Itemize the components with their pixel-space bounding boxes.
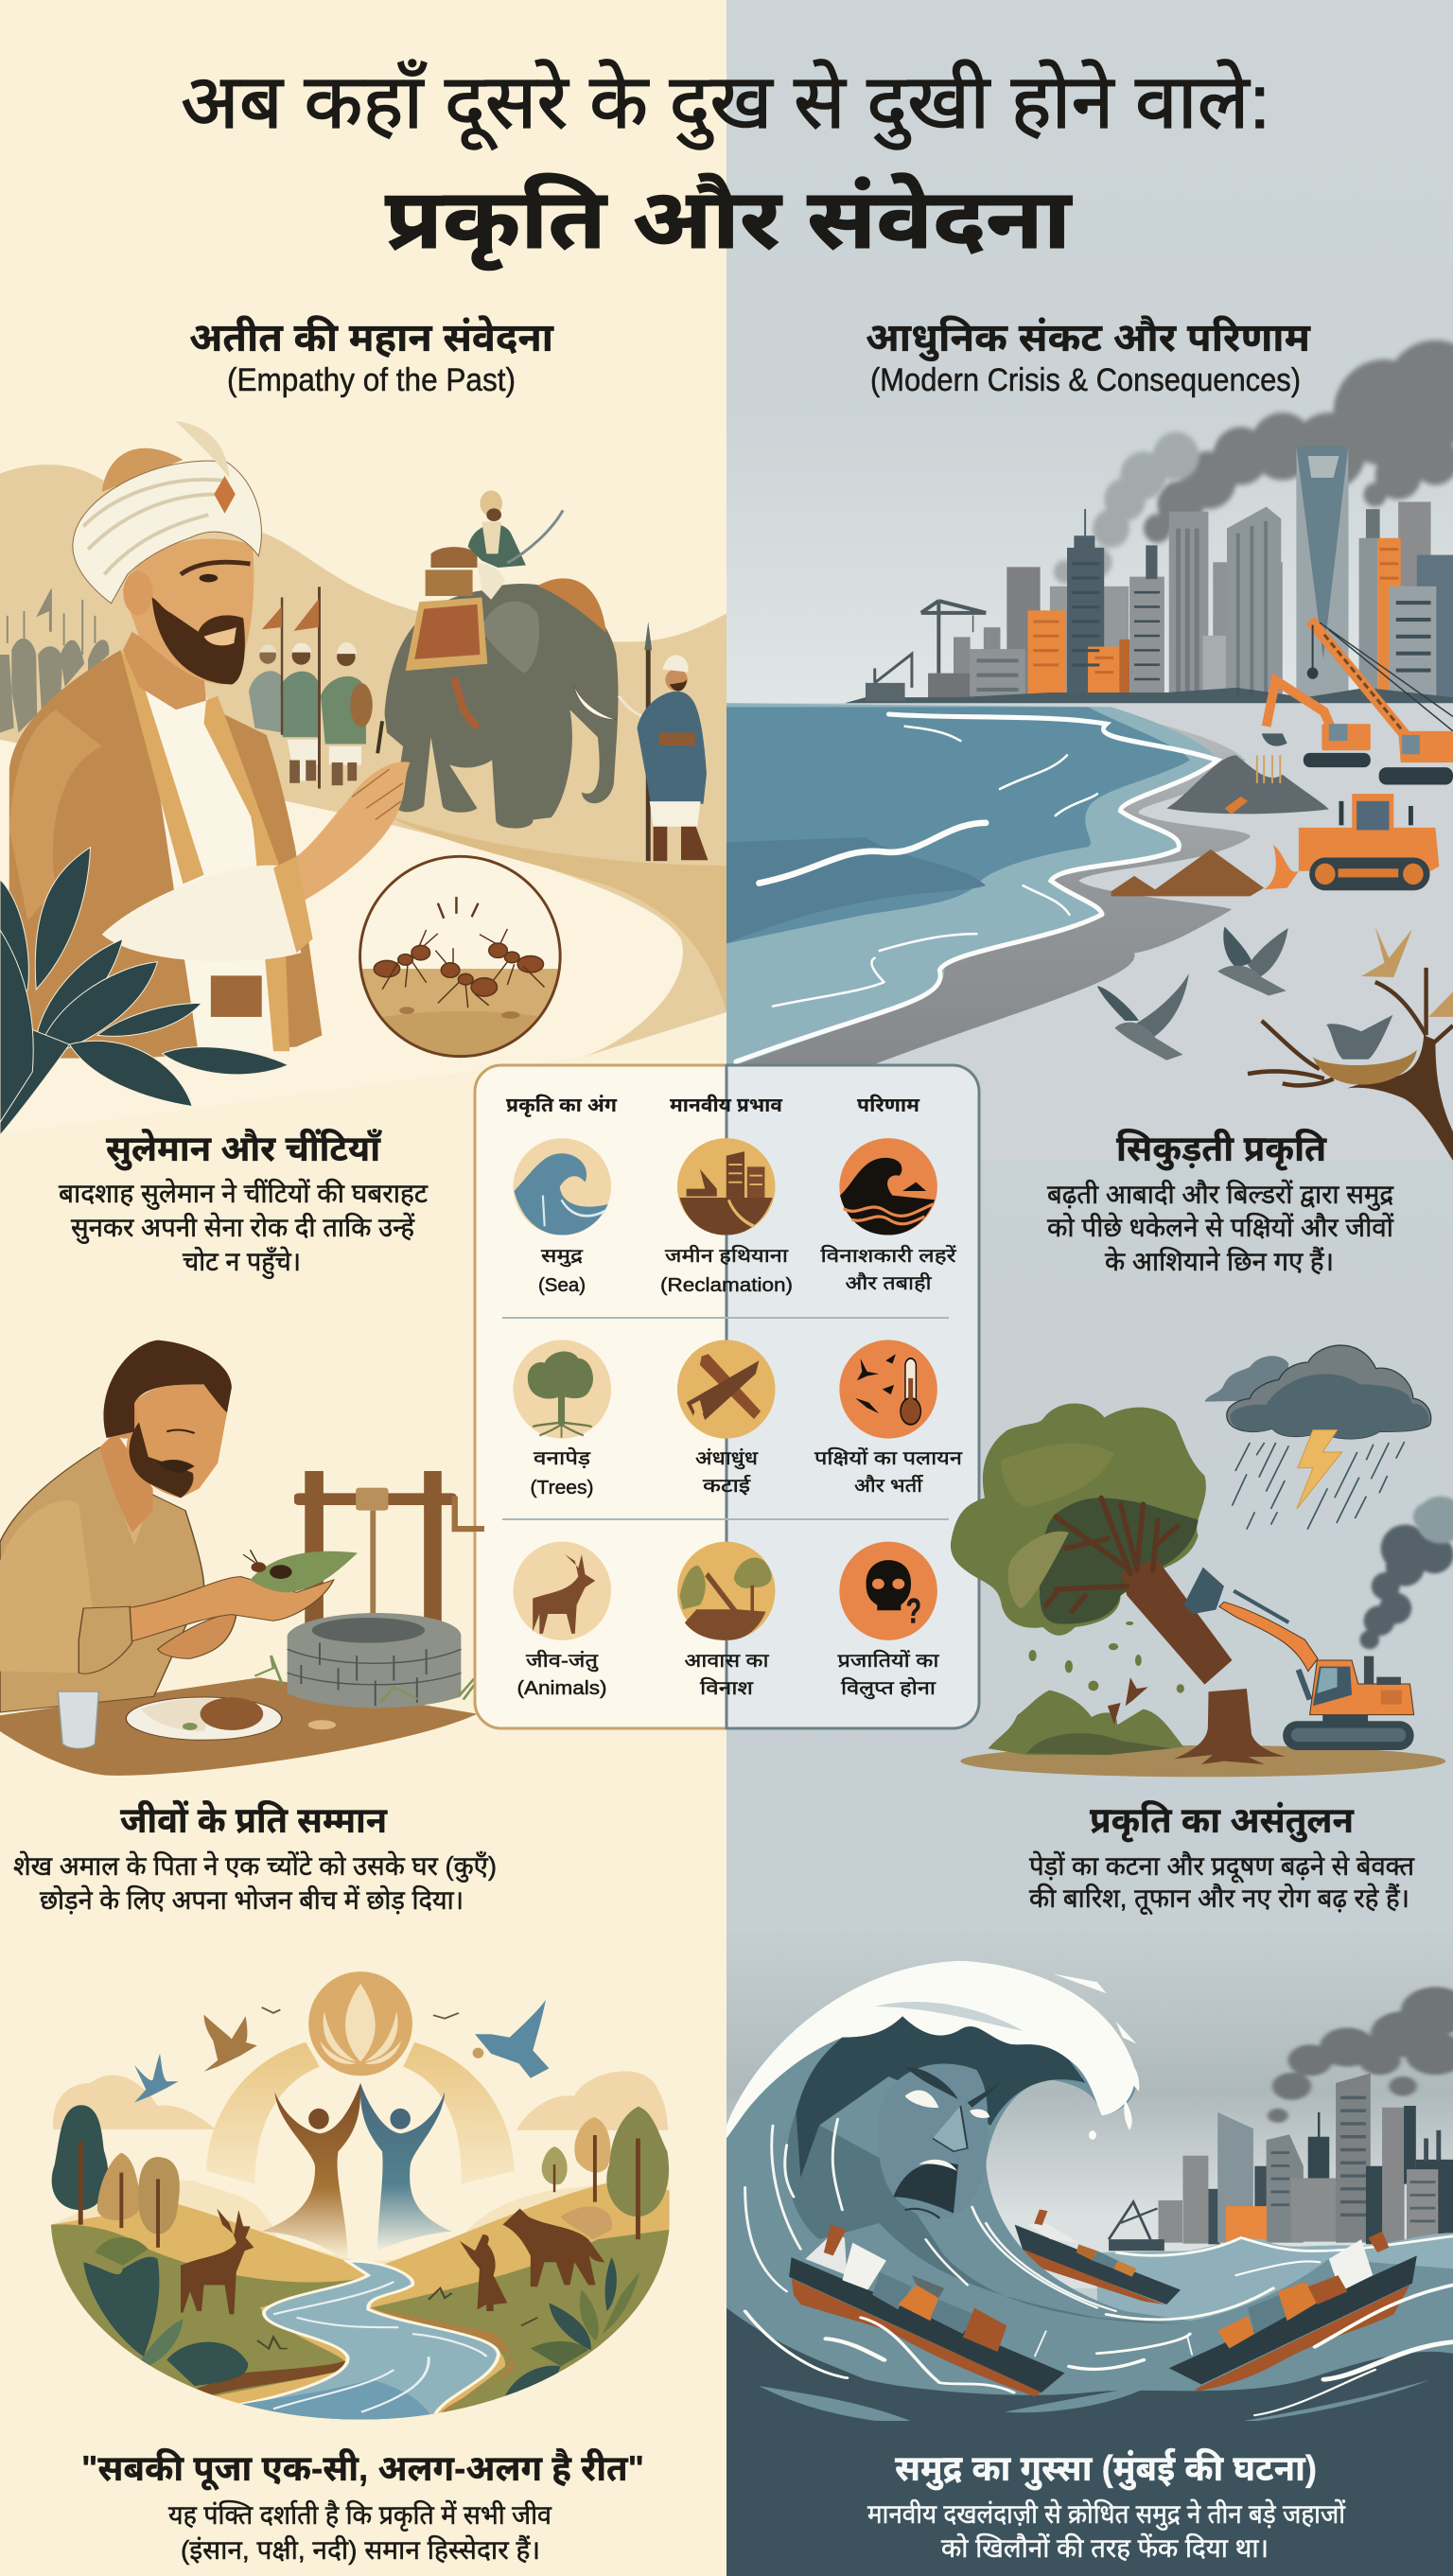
rain <box>1232 1442 1405 1530</box>
text block: nature imbalance <box>1029 1799 1415 1915</box>
storm sky <box>726 1930 1453 2288</box>
dark wave interior <box>796 2016 1086 2178</box>
panel: comparison table <box>475 1065 979 1728</box>
distant swell <box>1097 2233 1453 2441</box>
joined human figures <box>262 2083 452 2257</box>
distant cranes <box>875 601 986 688</box>
table labels: जीव-जंतु <box>526 1649 599 1673</box>
sand land <box>726 703 1453 1161</box>
text block: respect for creatures: शेख अमाल के पिता ने एक च्योंटे को उसके घर (कुएँ) <box>13 1850 497 1883</box>
bulldozer <box>1264 794 1439 890</box>
text block: anger of the sea: को खिलौनों की तरह फेंक दिया था। <box>941 2532 1269 2563</box>
excavator <box>1262 680 1371 767</box>
heading: empathy of the past: अतीत की महान संवेदना <box>189 315 554 359</box>
text block: anger of the sea: समुद्र का गुस्सा (मुंबई की घटना) <box>895 2447 1317 2491</box>
text block: quote: "सबकी पूजा एक-सी, अलग-अलग है रीत" <box>81 2447 644 2491</box>
white crest <box>726 1961 1135 2138</box>
text block: nature imbalance: की बारिश, तूफान और नए रोग बढ़ रहे हैं। <box>1029 1883 1409 1915</box>
table labels: अंधाधुंध <box>695 1447 759 1470</box>
heading: empathy of the past: (Empathy of the Past) <box>227 362 516 398</box>
left cargo ship <box>789 2225 1065 2396</box>
shirt <box>0 1447 204 1712</box>
guard with spear <box>637 622 708 861</box>
plate of food <box>126 1697 282 1740</box>
icon: sea wave <box>513 1138 611 1235</box>
cream road <box>0 740 683 1135</box>
title <box>181 59 1270 272</box>
skyline <box>845 447 1453 703</box>
lightning bolt <box>1297 1430 1342 1509</box>
foam swirls over ships <box>745 2261 1453 2415</box>
text block: anger of the sea <box>867 2447 1346 2563</box>
text block: shrinking nature: सिकुड़ती प्रकृति <box>1116 1128 1327 1171</box>
heading: empathy of the past <box>189 315 554 398</box>
table labels: विनाशकारी लहरें <box>821 1244 956 1267</box>
clouds <box>53 2071 668 2130</box>
table labels: प्रजातियों का <box>838 1649 939 1672</box>
elephant shadow ground <box>380 813 726 1012</box>
forearm and cupped hands <box>158 1613 236 1658</box>
table labels: (Sea) <box>538 1275 586 1296</box>
heading: modern crisis: (Modern Crisis & Consequences) <box>870 362 1301 398</box>
table labels: वनापेड़ <box>534 1446 590 1469</box>
trunk and branches <box>1046 1498 1232 1685</box>
icon: tree <box>513 1340 611 1439</box>
neck and face <box>123 632 206 710</box>
building windows <box>1271 2096 1435 2222</box>
illustration: unity of all beings <box>51 1971 670 2438</box>
text block: respect for creatures <box>13 1799 497 1915</box>
river <box>234 2261 499 2424</box>
wolf <box>502 2208 604 2287</box>
excavator <box>1183 1568 1414 1750</box>
lattice crane <box>1307 621 1453 784</box>
table labels: कटाई <box>703 1475 751 1497</box>
table <box>0 1677 477 1776</box>
rubble pile <box>1166 755 1329 814</box>
fallen bush <box>988 1691 1183 1755</box>
table icons <box>513 1138 937 1640</box>
table labels: और भर्ती <box>854 1474 923 1497</box>
text block: shrinking nature: को पीछे धकेलने से पक्षियों और जीवों <box>1047 1212 1394 1242</box>
table labels: पक्षियों का पलायन <box>814 1446 963 1469</box>
right cargo ship <box>1169 2232 1417 2391</box>
text block: respect for creatures: जीवों के प्रति सम्मान <box>120 1799 388 1841</box>
table labels: समुद्र <box>541 1246 583 1268</box>
illustration: angry sea wave and ships <box>726 1930 1453 2441</box>
table labels <box>516 1244 963 1700</box>
woman <box>460 2234 507 2311</box>
face <box>125 1383 227 1498</box>
soldiers <box>249 587 373 789</box>
illustration: man and ant at the well <box>0 1341 484 1776</box>
heading: modern crisis <box>866 315 1311 398</box>
trees right <box>542 2107 669 2239</box>
table labels: (Trees) <box>530 1478 594 1498</box>
elephant <box>377 547 644 829</box>
icon: destructive wave <box>839 1138 937 1235</box>
birds <box>1097 926 1288 1060</box>
well <box>254 1471 484 1708</box>
dark lower sea <box>726 2308 1453 2441</box>
falling leaves <box>1029 1621 1184 1693</box>
table card left half <box>475 1065 726 1728</box>
birds <box>134 2000 549 2103</box>
table labels: (Animals) <box>516 1678 607 1699</box>
foreground foliage <box>83 2257 159 2357</box>
text block: Sulaiman and ants: सुलेमान और चींटियाँ <box>106 1128 382 1171</box>
table labels: (Reclamation) <box>660 1275 793 1296</box>
icon: birds and thermometer <box>839 1340 937 1439</box>
giant wave <box>726 1961 1453 2441</box>
leaf and ant <box>250 1551 358 1592</box>
city skyline <box>1109 2074 1453 2251</box>
icon: skull and question mark <box>839 1542 937 1640</box>
dirt mound <box>1112 850 1264 896</box>
sea <box>726 703 1217 1069</box>
rider <box>468 491 563 600</box>
text block: Sulaiman and ants <box>59 1128 429 1279</box>
dark leaves <box>0 848 289 1135</box>
title: प्रकृति और संवेदना <box>385 172 1073 272</box>
table labels: जमीन हथियाना <box>665 1244 789 1267</box>
text block: shrinking nature: बढ़ती आबादी और बिल्डरों द्वारा समुद्र <box>1047 1179 1394 1211</box>
building window stripes <box>976 521 1430 695</box>
title: अब कहाँ दूसरे के दुख से दुखी होने वाले: <box>181 59 1270 150</box>
table labels: विनाश <box>700 1676 753 1699</box>
text block: Sulaiman and ants: सुनकर अपनी सेना रोक दी ताकि उन्हें <box>71 1212 415 1244</box>
storm cloud <box>1204 1345 1431 1439</box>
text block: quote <box>81 2447 644 2565</box>
caption background: bottom right dark sea <box>726 2421 1453 2576</box>
table labels: और तबाही <box>846 1271 932 1294</box>
lotus medallion <box>308 1971 412 2076</box>
background: right modern panel <box>726 0 1453 2576</box>
text block: shrinking nature: के आशियाने छिन गए हैं। <box>1105 1246 1334 1276</box>
column headings: मानवीय प्रभाव <box>670 1094 782 1116</box>
text block: quote: यह पंक्ति दर्शाती है कि प्रकृति में सभी जीव <box>168 2499 551 2532</box>
ant magnifier circle <box>357 855 566 1060</box>
glass <box>58 1691 98 1748</box>
heading: modern crisis: आधुनिक संकट और परिणाम <box>866 315 1311 361</box>
text block: anger of the sea: मानवीय दखलंदाज़ी से क्रोधित समुद्र ने तीन बड़े जहाजों <box>867 2498 1346 2531</box>
white foam lines <box>736 714 1217 1061</box>
grey shore <box>726 703 1251 1064</box>
excavator smoke <box>1360 1525 1453 1649</box>
illustration: shrinking coast and city <box>726 341 1453 1161</box>
angry face <box>880 2064 1000 2218</box>
water shading <box>726 837 986 943</box>
text block: Sulaiman and ants: चोट न पहुँचे। <box>183 1246 301 1279</box>
column headings: प्रकृति का अंग <box>506 1094 618 1117</box>
sun arch <box>206 2042 515 2184</box>
teal sea highlights <box>759 2379 1430 2428</box>
landscape disc <box>51 2171 670 2438</box>
text block: quote: (इंसान, पक्षी, नदी) समान हिस्सेदार हैं। <box>181 2534 540 2565</box>
desert hills <box>0 464 726 1135</box>
stump <box>1174 1689 1286 1764</box>
hair <box>103 1341 232 1438</box>
deer <box>181 2208 254 2314</box>
text block: nature imbalance: पेड़ों का कटना और प्रदूषण बढ़ने से बेवक्त <box>1029 1850 1415 1884</box>
icon: habitat destruction <box>677 1542 776 1640</box>
factory smoke <box>1268 1987 1453 2123</box>
table card right half <box>726 1065 979 1728</box>
trees left <box>52 2105 180 2248</box>
deep water <box>726 707 1190 943</box>
wave inner shading <box>786 2112 1181 2324</box>
nest and dead tree <box>1248 926 1453 1161</box>
Sulaiman figure <box>9 421 410 1059</box>
table labels: विलुप्त होना <box>841 1676 937 1700</box>
arm <box>296 762 410 902</box>
well crank over table edge <box>452 1526 484 1532</box>
icon: land reclamation <box>677 1138 776 1235</box>
beard <box>130 1422 193 1498</box>
wave streaks <box>745 2119 1115 2311</box>
illustration: felled tree and excavator <box>951 1345 1453 1777</box>
illustration: Sulaiman and the ants <box>0 421 726 1135</box>
far ship <box>1015 2210 1181 2304</box>
column headings <box>506 1094 919 1117</box>
tree canopy <box>951 1403 1206 1636</box>
ground <box>960 1745 1445 1777</box>
lighter smoke <box>1054 432 1199 584</box>
text block: Sulaiman and ants: बादशाह सुलेमान ने चींटियों की घबराहट <box>59 1178 429 1210</box>
icon: deer <box>513 1542 611 1640</box>
table labels: आवास का <box>685 1651 769 1672</box>
rear army <box>0 588 109 732</box>
smoke plumes <box>1144 341 1453 543</box>
column headings: परिणाम <box>857 1094 919 1116</box>
icon: saw and log <box>677 1340 776 1439</box>
pale smoke <box>1413 1497 1453 1544</box>
text block: respect for creatures: छोड़ने के लिए अपना भोजन बीच में छोड़ दिया। <box>40 1884 464 1915</box>
background: left past panel <box>0 0 726 2576</box>
icon: skull and question mark: ? <box>906 1592 921 1631</box>
sky <box>726 408 1453 703</box>
turban <box>102 448 183 492</box>
text block: nature imbalance: प्रकृति का असंतुलन <box>1090 1799 1355 1843</box>
text block: shrinking nature <box>1047 1128 1394 1276</box>
